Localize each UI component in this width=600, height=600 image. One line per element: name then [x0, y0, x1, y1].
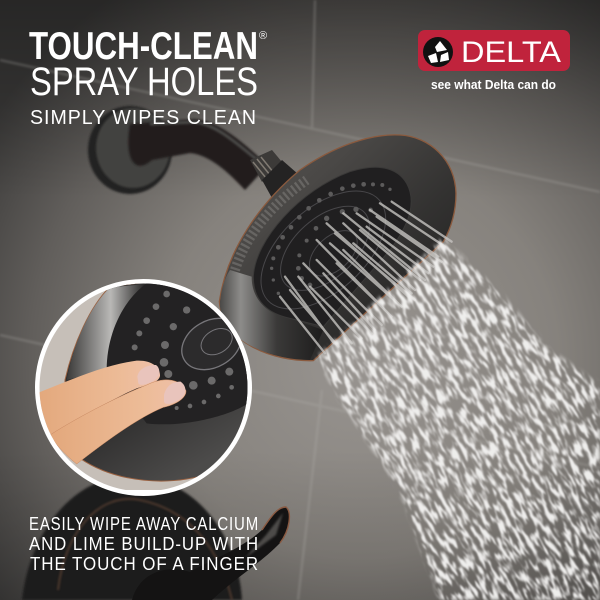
heading line 2: SPRAY HOLES	[30, 60, 258, 104]
head outer shell	[219, 135, 456, 361]
fingernails	[137, 365, 159, 385]
spray face	[253, 167, 411, 327]
water streaks leaving the nozzles	[280, 202, 452, 353]
nozzle rings	[240, 169, 407, 331]
inset circle: finger wiping spray holes	[35, 279, 252, 496]
inset medallion	[181, 318, 240, 370]
tagline: see what Delta can do	[431, 77, 556, 92]
wordmark: DELTA	[461, 36, 561, 69]
inset spray face	[107, 283, 250, 424]
shell highlight	[220, 270, 323, 360]
nozzle dots	[270, 182, 392, 295]
valve trim: escutcheon and lever handle	[22, 476, 289, 600]
caption: THE TOUCH OF A FINGER	[30, 554, 259, 574]
title: Touch-Clean Spray Holes	[29, 25, 267, 129]
caption: EASILY WIPE AWAY CALCIUM	[29, 514, 259, 534]
caption	[29, 514, 259, 574]
inset nozzles	[132, 291, 234, 410]
finger lower	[50, 380, 186, 464]
heading line 1: TOUCH-CLEAN	[29, 25, 258, 68]
subheading: SIMPLY WIPES CLEAN	[30, 107, 257, 129]
logo badge	[418, 30, 570, 71]
inset head shell	[65, 282, 250, 481]
shower head	[219, 135, 456, 361]
inset shell highlight	[67, 284, 147, 380]
wall flange and shower arm	[88, 106, 298, 198]
caption: AND LIME BUILD-UP WITH	[29, 534, 259, 554]
finger upper	[37, 361, 160, 437]
icon: Delta emblem	[423, 37, 453, 67]
Delta logo	[418, 30, 570, 92]
registered mark: ®	[259, 30, 267, 42]
inset background	[35, 280, 252, 490]
water spray	[300, 225, 600, 600]
